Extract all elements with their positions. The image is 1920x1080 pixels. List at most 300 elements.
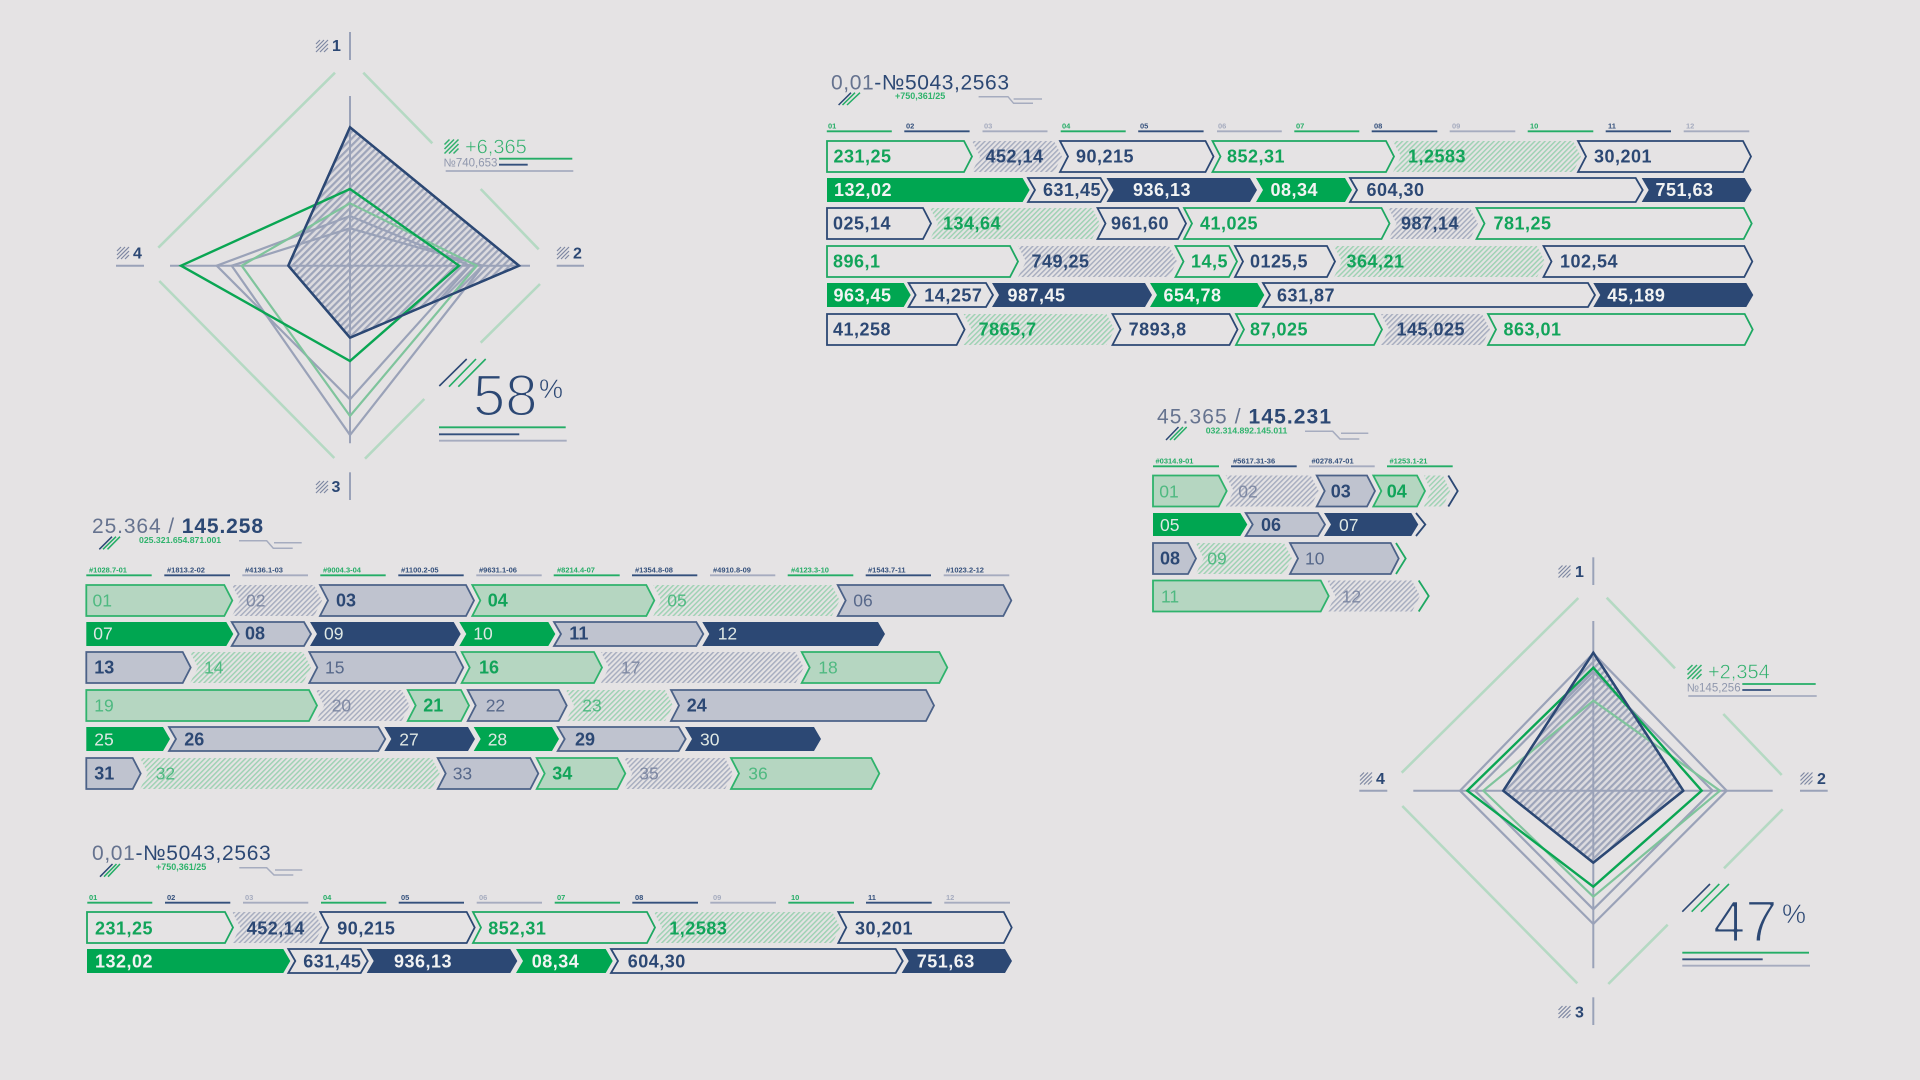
- 08: [232, 622, 311, 646]
- 987,45: [992, 283, 1152, 307]
- column headers: 06: [1218, 122, 1226, 130]
- grey series two: [232, 228, 483, 435]
- column headers: 06: [479, 893, 487, 902]
- callout: 47 percent: 47: [1713, 890, 1778, 954]
- 07: 07: [93, 624, 113, 644]
- 231,25: [87, 912, 233, 943]
- navy hatched series: [1503, 653, 1683, 863]
- 749,25: [1018, 246, 1177, 277]
- heading: 032.314.892.145.011: [1206, 426, 1288, 436]
- 0125,5: 0125,5: [1250, 252, 1308, 272]
- outer diamond frame: [158, 73, 540, 459]
- column headers: #1028.7-01: [89, 566, 127, 574]
- row 6: [86, 758, 879, 789]
- 90,215: [1060, 141, 1214, 172]
- column headers: 08: [635, 893, 643, 902]
- radar chart: bottom right: [1359, 557, 1828, 1025]
- heading: 25.364 / 145.258: [92, 515, 263, 538]
- 08,34: 08,34: [532, 951, 579, 971]
- 896,1: 896,1: [833, 252, 881, 272]
- 936,13: [367, 949, 517, 973]
- navy series outline: [288, 127, 519, 338]
- light green series: [1483, 701, 1720, 897]
- grey series two: [1475, 672, 1713, 909]
- callout: 58 percent: %: [539, 374, 563, 404]
- 654,78: [1150, 283, 1264, 307]
- 27: 27: [399, 730, 419, 750]
- green series: [181, 189, 459, 361]
- column headers: #5617.31-36: [1233, 456, 1275, 466]
- heading: [831, 72, 1042, 105]
- navy hatched series: [288, 127, 519, 338]
- row 6: [827, 314, 1753, 345]
- 26: 26: [184, 730, 204, 750]
- 08: [1153, 543, 1196, 574]
- heading: 025.321.654.871.001: [139, 535, 221, 545]
- 87,025: [1236, 314, 1382, 345]
- callout: 58 percent: [439, 359, 567, 441]
- 23: 23: [582, 696, 602, 716]
- 45,189: [1593, 283, 1753, 307]
- 34: [537, 758, 625, 789]
- axis label 3: [316, 472, 350, 500]
- callout: +2,354: [1687, 662, 1817, 696]
- axis label 2: 2: [573, 246, 582, 262]
- 12: [1327, 580, 1420, 612]
- 41,258: [827, 314, 965, 345]
- 025,14: [827, 208, 931, 239]
- radar chart: top left: [116, 32, 584, 500]
- row 2: [1153, 513, 1425, 536]
- column headers: #4910.8-09: [713, 566, 751, 574]
- 31: [86, 758, 141, 789]
- 07: [86, 622, 233, 646]
- 21: 21: [423, 696, 443, 716]
- 08: 08: [245, 624, 265, 644]
- column headers: 05: [401, 893, 409, 902]
- axis label 3: 3: [1575, 1004, 1584, 1022]
- 05: [653, 585, 840, 616]
- table: middle left numbered segments: [86, 515, 1011, 789]
- 936,13: [1106, 178, 1257, 202]
- column headers: #1813.2-02: [167, 566, 205, 574]
- 01: 01: [1159, 482, 1179, 502]
- 14,257: [909, 283, 993, 307]
- 90,215: [320, 912, 475, 943]
- 36: 36: [748, 764, 768, 784]
- 025,14: 025,14: [833, 214, 891, 234]
- 02: 02: [246, 591, 265, 611]
- column headers: 01: [828, 122, 836, 130]
- 631,45: 631,45: [303, 951, 361, 971]
- column headers: 12: [1686, 122, 1694, 130]
- 749,25: 749,25: [1032, 252, 1090, 272]
- green series: [1467, 668, 1702, 887]
- 17: 17: [621, 658, 640, 678]
- heading: 0,01-№5043,2563: [831, 72, 1009, 94]
- callout: +2,354: +2,354: [1708, 662, 1770, 684]
- callout: 47 percent: %: [1782, 899, 1806, 929]
- 10: 10: [1305, 548, 1325, 568]
- 1,2583: 1,2583: [669, 918, 727, 938]
- 30: [685, 727, 821, 751]
- outer diamond frame: [1402, 598, 1783, 984]
- 04: [472, 585, 654, 616]
- 22: 22: [486, 696, 505, 716]
- 30: 30: [700, 730, 720, 750]
- column headers: 11: [868, 893, 876, 902]
- 24: 24: [687, 696, 707, 716]
- 04: 04: [1387, 482, 1407, 502]
- 18: [802, 652, 947, 683]
- column headers: #8214.4-07: [557, 566, 595, 574]
- 102,54: 102,54: [1560, 252, 1618, 272]
- 30,201: [838, 912, 1012, 943]
- axis label 1: 1: [332, 38, 341, 55]
- 14,5: [1176, 246, 1237, 277]
- column headers: 04: [323, 893, 332, 902]
- 7893,8: [1112, 314, 1238, 345]
- column headers: 12: [946, 893, 954, 902]
- 15: 15: [325, 658, 344, 678]
- 02: [232, 585, 322, 616]
- column headers: 07: [1296, 122, 1304, 130]
- column headers: #1100.2-05: [401, 566, 439, 574]
- 32: [140, 758, 440, 789]
- 631,45: 631,45: [1043, 180, 1101, 200]
- 14: 14: [204, 658, 224, 678]
- 08: 08: [1160, 548, 1180, 568]
- 10: [459, 622, 555, 646]
- 751,63: [1642, 178, 1752, 202]
- axis label 2: [557, 246, 584, 266]
- 16: [462, 652, 602, 683]
- 751,63: 751,63: [1656, 180, 1714, 200]
- 33: [438, 758, 538, 789]
- 7865,7: 7865,7: [979, 319, 1037, 339]
- 134,64: 134,64: [943, 214, 1001, 234]
- axis label 1: 1: [1575, 564, 1584, 581]
- axis label 4: 4: [1376, 771, 1385, 788]
- column headers: 11: [1608, 122, 1616, 130]
- 01: 01: [92, 591, 112, 611]
- column headers: #1253.1-21: [1390, 456, 1427, 466]
- 364,21: 364,21: [1346, 252, 1405, 272]
- 11: 11: [1161, 586, 1179, 606]
- axis label 4: 4: [133, 246, 142, 262]
- 06: 06: [853, 591, 873, 611]
- table: centre right numbered segments: [1153, 406, 1458, 612]
- 963,45: [827, 283, 911, 307]
- axis label 1: [1558, 557, 1593, 585]
- 09: [310, 622, 461, 646]
- 134,64: [930, 208, 1100, 239]
- row 4: [86, 690, 934, 721]
- 364,21: [1334, 246, 1545, 277]
- chevron end: [1448, 476, 1458, 506]
- grey series one: [217, 216, 470, 399]
- 852,31: [473, 912, 655, 943]
- column headers: 05: [1140, 122, 1148, 130]
- 25: 25: [94, 730, 114, 750]
- 90,215: 90,215: [1076, 146, 1134, 166]
- column headers: #1023.2-12: [946, 566, 984, 574]
- 631,87: 631,87: [1277, 285, 1335, 305]
- 08,34: [516, 949, 613, 973]
- 987,14: [1388, 208, 1478, 239]
- 896,1: [827, 246, 1018, 277]
- 20: [316, 690, 410, 721]
- 03: 03: [336, 591, 356, 611]
- 08,34: 08,34: [1270, 180, 1318, 200]
- callout: +6,365: [444, 136, 573, 171]
- 231,25: 231,25: [95, 918, 153, 938]
- 936,13: 936,13: [1133, 180, 1191, 200]
- 30,201: 30,201: [1594, 146, 1652, 166]
- 07: [1324, 513, 1418, 536]
- heading: 45.365 / 145.231: [1157, 406, 1331, 428]
- 34: 34: [552, 764, 572, 784]
- 987,14: 987,14: [1401, 214, 1459, 234]
- 41,258: 41,258: [833, 319, 891, 339]
- 231,25: 231,25: [834, 146, 892, 166]
- 32: 32: [156, 764, 175, 784]
- 14: [190, 652, 311, 683]
- chevron end: [1396, 543, 1406, 574]
- 863,01: [1488, 314, 1753, 345]
- 452,14: 452,14: [986, 146, 1044, 166]
- 604,30: 604,30: [628, 951, 686, 971]
- 654,78: 654,78: [1164, 285, 1222, 305]
- 17: [601, 652, 804, 683]
- 06: [1246, 513, 1325, 536]
- 961,60: 961,60: [1111, 214, 1169, 234]
- 1,2583: [1393, 141, 1581, 172]
- column headers: 04: [1062, 122, 1071, 130]
- chevron end: [1419, 580, 1429, 612]
- row 3: [1153, 543, 1406, 574]
- axis label 1: [316, 32, 350, 60]
- hatched stub: [1424, 476, 1450, 506]
- 11: [1153, 580, 1329, 612]
- 963,45: 963,45: [834, 285, 892, 305]
- 31: 31: [94, 764, 114, 784]
- 12: [702, 622, 885, 646]
- 20: 20: [332, 696, 351, 716]
- 852,31: 852,31: [488, 918, 546, 938]
- 132,02: [87, 949, 290, 973]
- 604,30: 604,30: [1366, 180, 1425, 200]
- 14,5: 14,5: [1191, 252, 1228, 272]
- radar axes: [170, 96, 530, 443]
- heading: [1157, 406, 1368, 440]
- 02: [1226, 476, 1319, 506]
- 09: 09: [324, 624, 343, 644]
- 03: [320, 585, 474, 616]
- 863,01: 863,01: [1504, 319, 1562, 339]
- row 1: [827, 141, 1751, 172]
- callout: +6,365: +6,365: [465, 136, 527, 158]
- axis label 3: 3: [332, 479, 340, 496]
- 03: [1317, 476, 1375, 506]
- 06: 06: [1261, 515, 1281, 535]
- 452,14: [232, 912, 322, 943]
- 07: 07: [1339, 515, 1358, 535]
- 21: [408, 690, 469, 721]
- column headers: #1354.8-08: [635, 566, 673, 574]
- 35: [624, 758, 733, 789]
- 30,201: [1578, 141, 1751, 172]
- column headers: #9631.1-06: [479, 566, 517, 574]
- 961,60: [1098, 208, 1186, 239]
- callout: +6,365: №740,653: [444, 158, 497, 170]
- 145,025: 145,025: [1396, 319, 1465, 339]
- 936,13: 936,13: [394, 951, 452, 971]
- heading: 0,01-№5043,2563: [92, 842, 271, 865]
- table: top right values: [827, 72, 1753, 345]
- 29: [558, 727, 686, 751]
- column headers: 09: [1452, 122, 1460, 130]
- heading: [92, 842, 302, 877]
- 631,45: [288, 949, 368, 973]
- column headers: [827, 122, 1749, 131]
- column headers: 07: [557, 893, 565, 902]
- 987,45: 987,45: [1008, 285, 1066, 305]
- column headers: #4136.1-03: [245, 566, 283, 574]
- 18: 18: [818, 658, 838, 678]
- 41,025: [1184, 208, 1390, 239]
- column headers: #1543.7-11: [868, 566, 906, 574]
- 452,14: [972, 141, 1062, 172]
- 22: [468, 690, 567, 721]
- 15: [309, 652, 463, 683]
- 13: [86, 652, 191, 683]
- 06: [838, 585, 1011, 616]
- axis label 4: [1359, 771, 1387, 791]
- row 2: [87, 949, 1012, 973]
- 852,31: [1212, 141, 1394, 172]
- row 4: [827, 246, 1752, 277]
- 852,31: 852,31: [1227, 146, 1285, 166]
- 08,34: [1256, 178, 1352, 202]
- 41,025: 41,025: [1200, 214, 1258, 234]
- 12: 12: [718, 624, 737, 644]
- 751,63: [902, 949, 1012, 973]
- 29: 29: [575, 730, 595, 750]
- light green series: [242, 203, 477, 416]
- row 2: [827, 178, 1752, 202]
- 26: [169, 727, 385, 751]
- 751,63: 751,63: [917, 951, 975, 971]
- grey series one: [1460, 653, 1727, 924]
- 11: 11: [569, 624, 588, 644]
- 145,025: [1381, 314, 1490, 345]
- column headers: [1153, 456, 1453, 466]
- column headers: 10: [791, 893, 799, 902]
- 781,25: [1476, 208, 1752, 239]
- 87,025: 87,025: [1250, 319, 1308, 339]
- 23: [566, 690, 673, 721]
- axis label 4: [116, 246, 144, 266]
- 33: 33: [453, 764, 472, 784]
- 27: [384, 727, 475, 751]
- callout: 58 percent: 58: [473, 364, 538, 428]
- column headers: 08: [1374, 122, 1382, 130]
- 09: 09: [1207, 548, 1227, 568]
- 05: 05: [667, 591, 687, 611]
- column headers: #0278.47-01: [1312, 456, 1354, 466]
- 01: [1153, 476, 1227, 506]
- row 3: [827, 208, 1752, 239]
- 231,25: [827, 141, 972, 172]
- 7893,8: 7893,8: [1129, 319, 1187, 339]
- column headers: 02: [167, 893, 175, 902]
- 05: 05: [1160, 515, 1179, 535]
- chevron end: [1416, 513, 1425, 536]
- 09: [1196, 543, 1292, 574]
- 781,25: 781,25: [1494, 214, 1552, 234]
- heading: [92, 515, 302, 549]
- row 1: [1153, 476, 1458, 506]
- 28: [474, 727, 559, 751]
- column headers: 01: [89, 893, 97, 902]
- 19: [86, 690, 317, 721]
- row 1: [87, 912, 1012, 943]
- table: bottom left values: [87, 842, 1012, 973]
- row 5: [827, 283, 1753, 307]
- 45,189: 45,189: [1607, 285, 1665, 305]
- 10: [1290, 543, 1399, 574]
- 90,215: 90,215: [337, 918, 395, 938]
- column headers: #9004.3-04: [323, 566, 362, 574]
- column headers: #0314.9-01: [1156, 456, 1193, 466]
- 1,2583: [654, 912, 840, 943]
- row 4: [1153, 580, 1429, 612]
- heading: +750,361/25: [156, 862, 206, 872]
- 12: 12: [1342, 586, 1361, 606]
- row 5: [86, 727, 821, 751]
- column headers: [87, 893, 1010, 903]
- column headers: 09: [713, 893, 721, 902]
- axis label 3: [1558, 997, 1593, 1025]
- callout: 47 percent: [1682, 884, 1810, 966]
- heading: +750,361/25: [895, 91, 945, 101]
- 02: 02: [1238, 482, 1258, 502]
- 604,30: [611, 949, 903, 973]
- radar axes: [1413, 621, 1773, 968]
- column headers: 10: [1530, 122, 1538, 130]
- 04: [1373, 476, 1425, 506]
- 04: 04: [488, 591, 508, 611]
- 14,257: 14,257: [924, 285, 982, 305]
- 11: [554, 622, 703, 646]
- 7865,7: [964, 314, 1114, 345]
- 03: 03: [1331, 482, 1351, 502]
- row 1: [86, 585, 1011, 616]
- 36: [731, 758, 879, 789]
- 631,87: [1263, 283, 1595, 307]
- column headers: [86, 566, 1009, 575]
- 35: 35: [639, 764, 659, 784]
- 28: 28: [488, 730, 507, 750]
- 132,02: [827, 178, 1030, 202]
- 05: [1153, 513, 1247, 536]
- navy series outline: [1503, 653, 1683, 863]
- 16: 16: [479, 658, 499, 678]
- 1,2583: 1,2583: [1408, 146, 1466, 166]
- 13: 13: [94, 658, 114, 678]
- column headers: 02: [906, 122, 914, 130]
